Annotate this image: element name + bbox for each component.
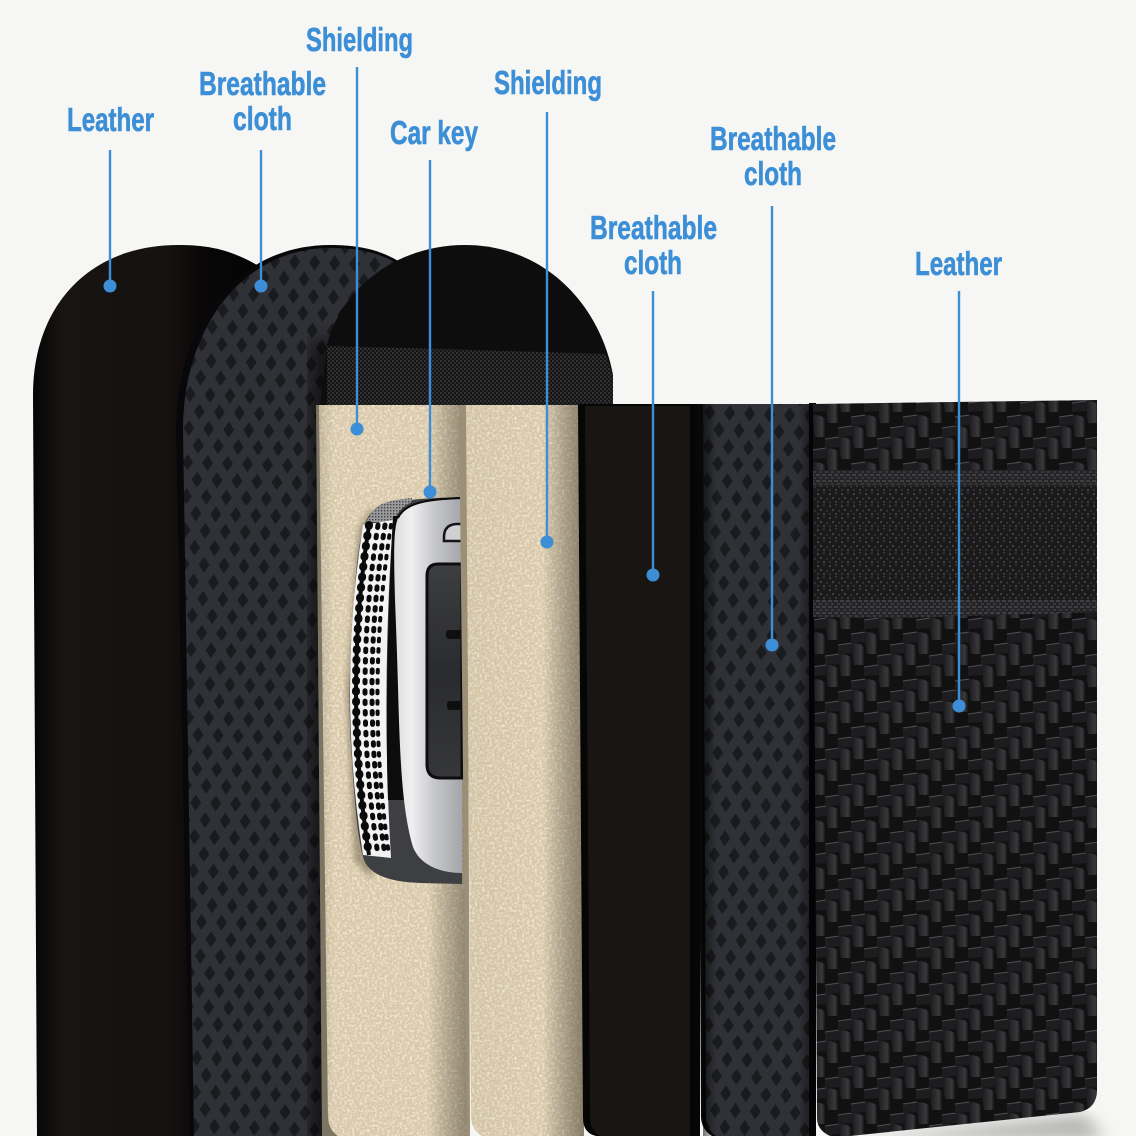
panel: gap between shielding layers (459, 405, 470, 1136)
panel: left shielding layer (316, 405, 470, 1136)
callout: Leather (back): Leather (67, 101, 154, 138)
callout: Breathable cloth (back): Breathable (199, 65, 326, 102)
callout: Breathable cloth (front) (710, 120, 836, 652)
icon: car key (346, 497, 462, 884)
callout: Shielding (left) (306, 21, 413, 436)
callout: Shielding (right): Shielding (494, 64, 602, 101)
top edge line (398, 498, 462, 518)
button marks (446, 630, 462, 639)
display panel (427, 564, 462, 778)
dark scallop edge (356, 525, 369, 855)
callout: Breathable cloth (back): cloth (233, 100, 292, 137)
key shadow (346, 505, 372, 880)
rows of dots (365, 525, 391, 855)
lower weave (814, 610, 1097, 1136)
silver face (394, 499, 462, 873)
callout: Breathable cloth (black layer) (590, 209, 717, 582)
callout: Shielding (left): Shielding (306, 21, 413, 58)
white dotted strip (350, 520, 393, 858)
callout: Shielding (right) (494, 64, 602, 548)
callout: Leather (back) (67, 101, 154, 292)
panel: black layer (578, 404, 700, 1136)
top button (444, 524, 462, 541)
upper weave (813, 400, 1097, 480)
key body (350, 497, 462, 884)
callout: Breathable cloth (black layer): cloth (624, 244, 682, 281)
shadow under pouch (850, 1114, 1105, 1136)
panel: right shielding layer (466, 405, 584, 1136)
callout: Breathable cloth (back) (199, 65, 326, 292)
callout: Breathable cloth (front): cloth (744, 155, 802, 192)
mesh band (327, 346, 613, 405)
panel: back breathable cloth layer (176, 245, 400, 1136)
callout: Car key: Car key (390, 114, 478, 151)
callout: Leather (front) (915, 245, 1002, 712)
panel: back leather layer (33, 245, 262, 1136)
callout: Car key (390, 114, 478, 498)
callout: Leather (front): Leather (915, 245, 1002, 282)
panel: front carbon-weave leather layer (809, 400, 1105, 1136)
panel: top flap with velcro and mesh (320, 245, 613, 405)
callout: Breathable cloth (front): Breathable (710, 120, 836, 157)
textured top edge (366, 498, 412, 522)
callout: Breathable cloth (black layer): Breathable (590, 209, 717, 246)
velcro strap (813, 470, 1097, 618)
panel: front breathable cloth layer (697, 404, 816, 1136)
dark inner band (387, 516, 406, 800)
